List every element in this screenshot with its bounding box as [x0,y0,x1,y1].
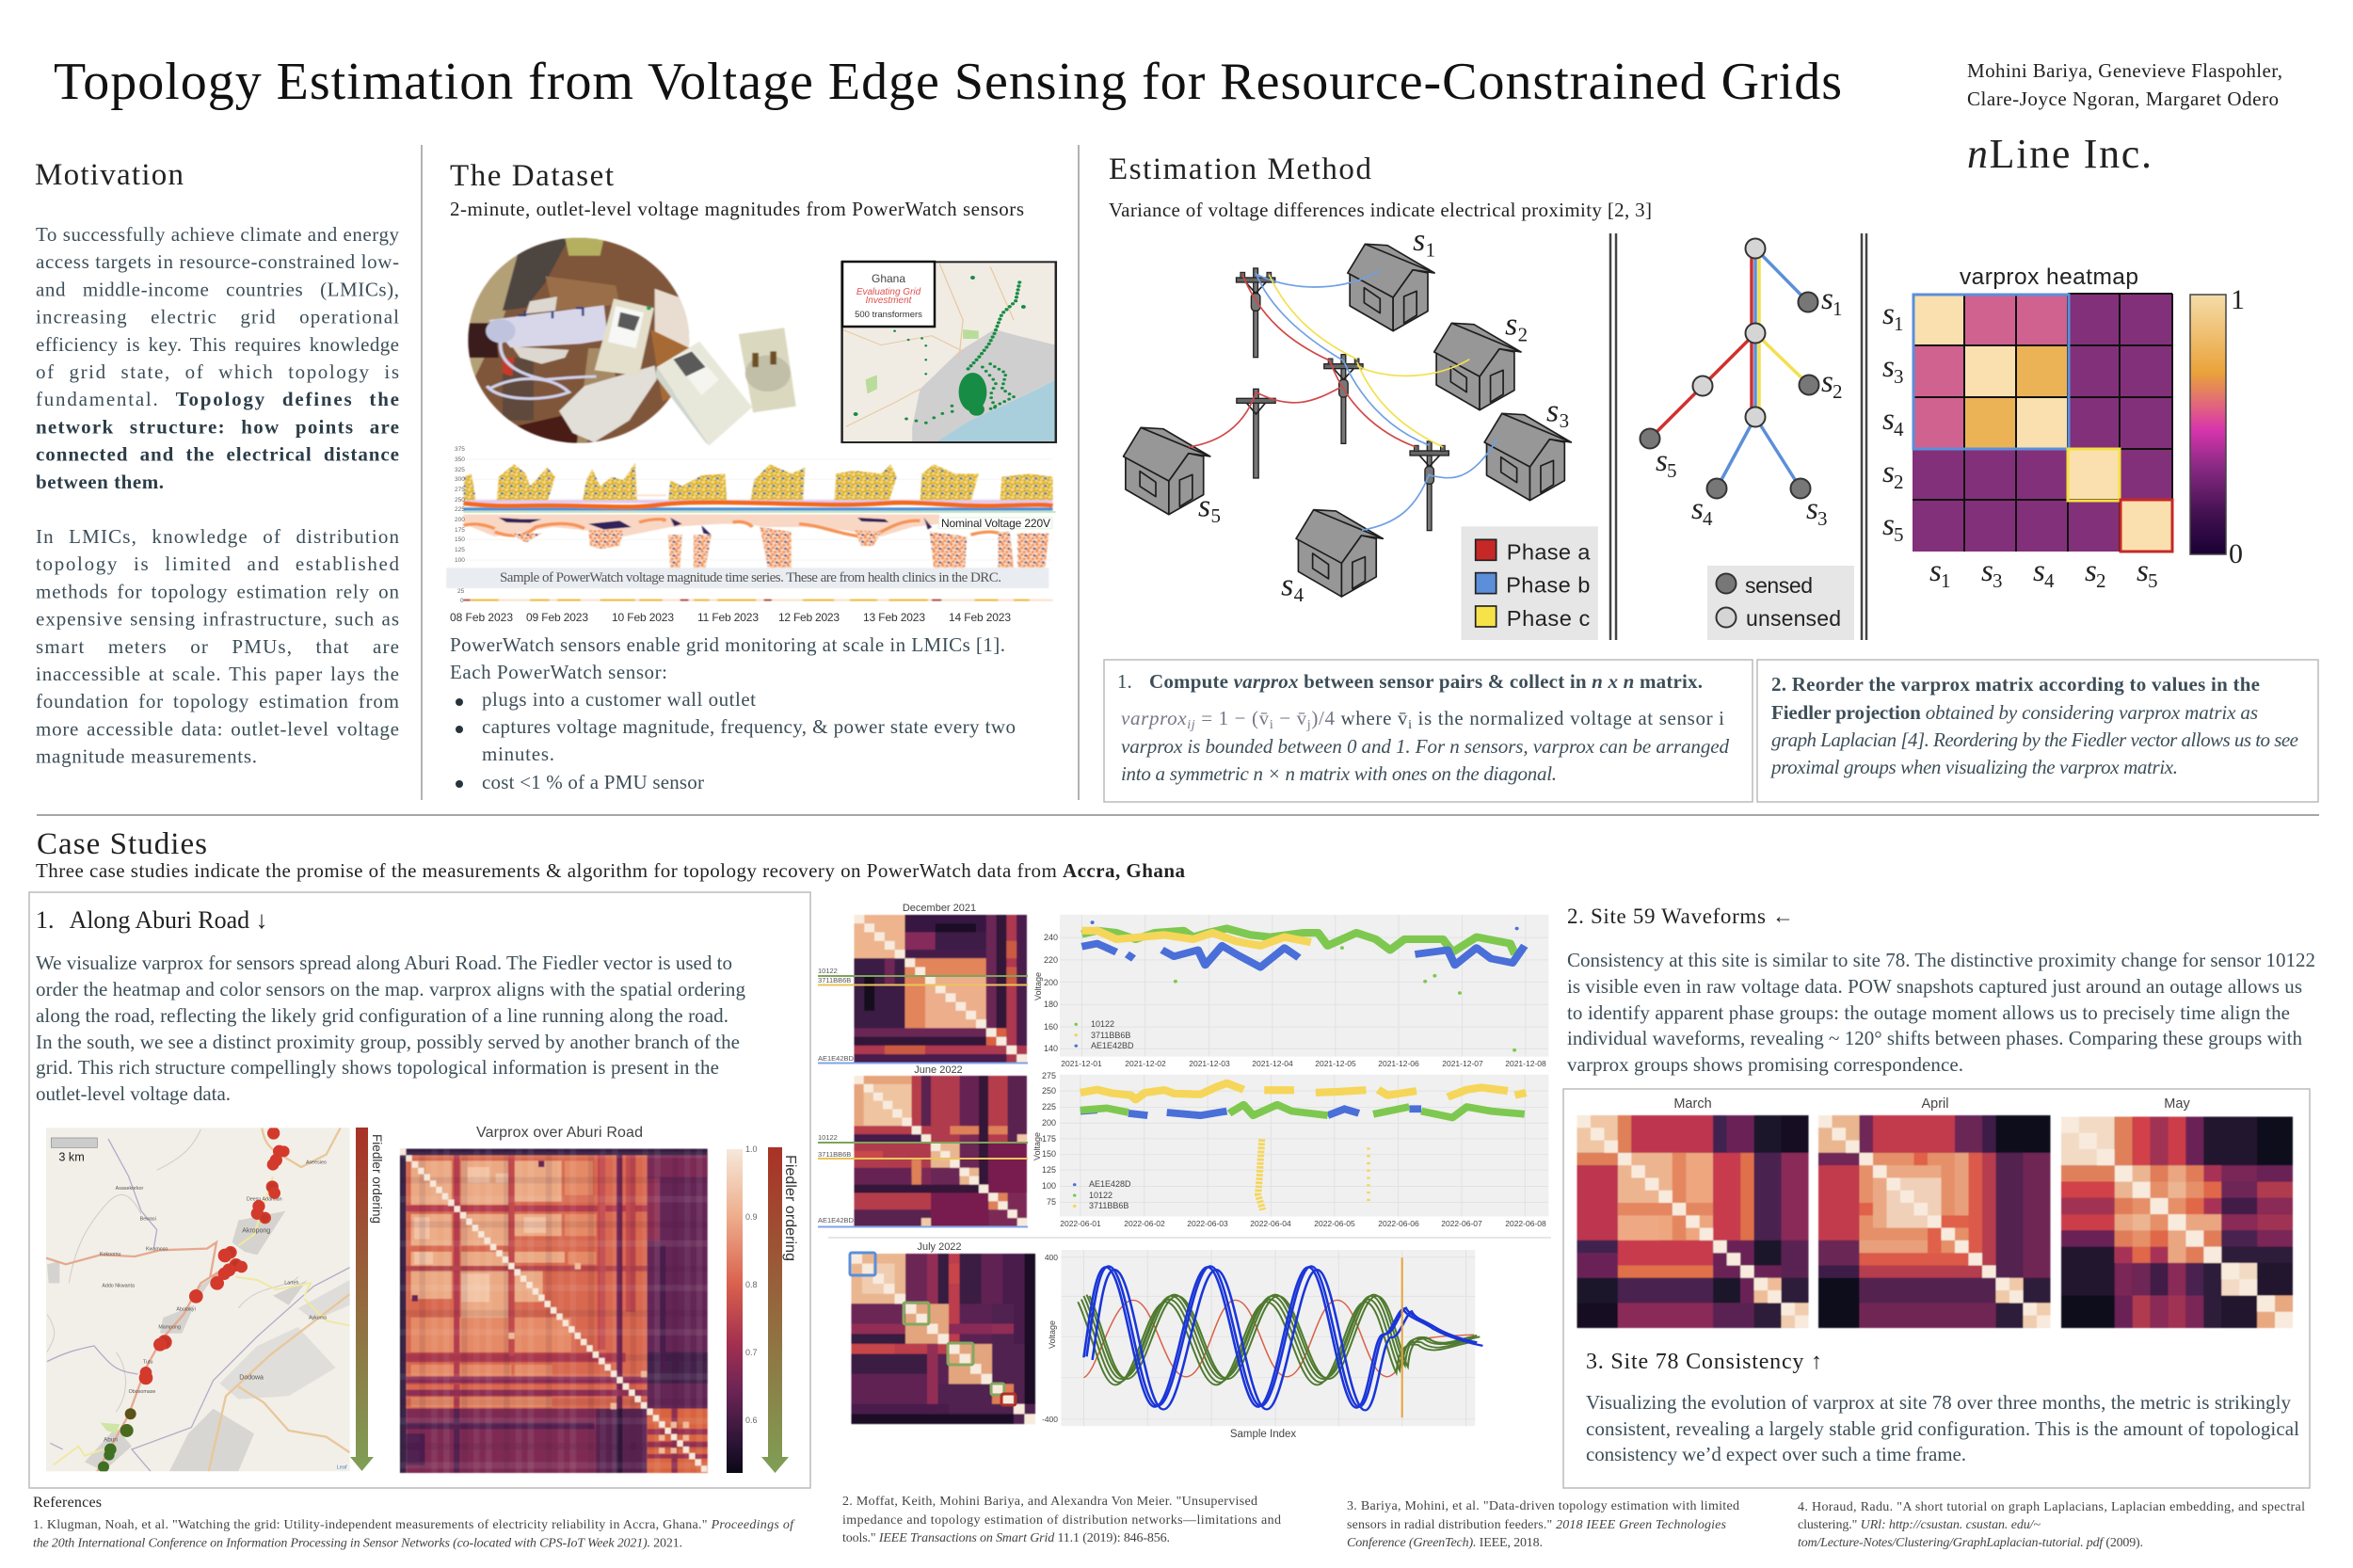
chart: varprox over Aburi Road heatmap: Varprox over Aburi Road [476,1125,643,1141]
text block: motivation paragraph one: of grid state, of which topology is [36,360,399,383]
text block: motivation paragraph one: fundamental. Topology defines the [36,388,399,410]
text block: site 59 description: varprox groups shows promising correspondence. [1567,1053,1963,1076]
diagram: network tree: s [1821,365,1833,399]
text block: site 59 description: to identify apparent phase groups: the outage moment allows us to precisely time align the [1567,1001,2290,1024]
map inset: Ghana label: Investment [866,296,913,306]
diagram: houses, poles and phase wiring [1124,223,1598,640]
map: Aburi Road sensors: Larteh [284,1280,298,1286]
heatmap: April [1818,1096,2050,1328]
reference 3: Conference (GreenTech). IEEE, 2018. [1347,1536,1543,1550]
reference 2: 2. Moffat, Keith, Mohini Bariya, and Alexandra Von Meier. "Unsupervised [842,1495,1257,1509]
diagram: network tree: 4 [1703,507,1713,530]
axis labels: sensors: s [1882,403,1895,437]
axis ticks: voltage: 325 [455,467,465,473]
chart: December 2021 voltage: 220 [1044,955,1058,965]
text block: motivation paragraph one: between them. [36,471,164,493]
diagram: houses, poles and phase wiring: 1 [1426,239,1435,262]
diagram: network tree: 2 [1833,380,1843,403]
heading: site 59 waveforms: 2. Site 59 Waveforms ← [1567,904,1794,928]
text block: motivation paragraph one: access targets in resource-constrained low- [36,250,399,273]
axis ticks: voltage: 275 [455,487,465,493]
reference 1: 1. Klugman, Noah, et al. "Watching the grid: Utility-independent measurements of electricity reliability in Accra, Ghana." Proceedings of [33,1518,795,1532]
chart: June 2022 voltage: 175 [1042,1134,1056,1144]
diagram: network tree: s [1806,492,1818,526]
axis labels: sensors: 5 [1894,523,1903,546]
callout: step 2 reorder matrix: graph Laplacian [4]. Reordering by the Fiedler vector allows us to see [1771,728,2298,751]
text block: Aburi description: outlet-level voltage data. [36,1082,231,1105]
axis labels: sensors: s [1929,554,1942,588]
photo: PowerWatch sensor in hands [463,235,796,445]
heatmap: June 2022: June 2022 [914,1064,963,1076]
heatmap: June 2022: AE1E42BD [818,1216,855,1224]
axis ticks: voltage: 25 [457,588,465,595]
axis labels: sensors: s [2085,554,2097,588]
diagram: network tree [1640,239,1854,640]
text block: dataset description: Each PowerWatch sensor: [450,661,667,683]
axis labels: sensors: 1 [1894,312,1903,335]
highlights: phase groups on heatmap [850,1253,1016,1405]
text block: Aburi description: grid. This rich structure compellingly shows topological information is present in the [36,1056,719,1079]
heading: site 78 consistency: 3. Site 78 Consistency ↑ [1586,1350,1822,1374]
heading: case studies: Case Studies [37,827,207,861]
colorbar: varprox scale: 1.0 [745,1144,758,1154]
callout: step 1 compute varprox: − v̄ [1273,707,1307,729]
chart: December 2021 voltage: 2021-12-05 [1315,1059,1356,1068]
text block: site 59 description: Consistency at this site is similar to site 78. The distinctive proximity change for sensor 10122 [1567,949,2315,971]
callout: step 2 reorder matrix: proximal groups when visualizing the varprox matrix. [1769,756,2178,778]
colorbar: varprox scale: 0.8 [745,1280,758,1289]
heatmap: July 2022: July 2022 [917,1241,962,1253]
diagram: houses, poles and phase wiring: s [1413,223,1425,258]
map: Aburi Road sensors: Abotakyi [176,1306,196,1312]
legend: phases [1461,526,1598,640]
map: Aburi Road sensors: Asasekorkor [116,1186,143,1192]
chart: July 2022 waveforms [1042,1250,1482,1440]
text block: dataset description: captures voltage magnitude, frequency, & power state every two [482,715,1016,738]
axis labels: sensors: s [1882,350,1895,384]
axis labels: sensors [1882,297,2157,592]
axis ticks: voltage: 250 [455,497,465,504]
diagram: houses, poles and phase wiring: 2 [1518,323,1528,345]
axis labels: sensors: 2 [2096,569,2106,592]
axis labels: sensors: 3 [1894,365,1903,388]
text block: site 78 description: Visualizing the evolution of varprox at site 78 over three months, the metric is strikingly [1586,1391,2291,1414]
axis labels: sensors: 1 [1941,569,1950,592]
axis ticks: voltage: 0 [460,598,464,604]
chart: June 2022 voltage: 2022-06-01 [1060,1219,1101,1228]
axis labels: sensors: s [2137,554,2149,588]
chart: varprox over Aburi Road heatmap [400,1125,798,1473]
text block: motivation paragraph two: inaccessible at scale. This paper lays the [36,663,399,685]
callout: step 1 compute varprox: varprox [1121,707,1187,729]
chart: December 2021 voltage: 160 [1044,1022,1058,1032]
axis ticks: voltage: 300 [455,476,465,483]
callout: step 1 compute varprox: into a symmetric n × n matrix with ones on the diagonal. [1121,762,1557,785]
chart: December 2021 voltage: 180 [1044,1000,1058,1009]
arrow: Fiedler ordering beside map [350,1128,384,1471]
diagram: houses, poles and phase wiring: 4 [1294,584,1305,606]
legend: sensed and unsensed: sensed [1745,573,1813,598]
callout: step 1 compute varprox: 1. [1117,670,1132,693]
map: Aburi Road sensors: 3 km [58,1150,85,1163]
axis dates [450,611,1011,624]
chart: PowerWatch voltage time series [446,446,1056,624]
legend: phases: Phase a [1507,539,1591,564]
chart: December 2021 voltage: 10122 [1091,1019,1114,1029]
chart: June 2022 voltage: 250 [1042,1086,1056,1096]
heading: the dataset: The Dataset [450,159,614,193]
diagram: network tree: 3 [1817,507,1828,530]
colorbar: varprox scale: 0.6 [745,1416,758,1425]
text block: site 59 description: individual waveforms, revealing ~ 120° shifts between phases. Comparing these groups with [1567,1027,2302,1049]
axis labels: sensors: 4 [2044,569,2055,592]
colorbar: varprox scale [727,1144,758,1473]
chart: December 2021 voltage: 2021-12-07 [1442,1059,1483,1068]
text block: Aburi description: In the south, we see a distinct proximity group, possibly served by another branch of the [36,1031,740,1053]
chart: December 2021 voltage: 240 [1044,933,1058,942]
reference 4 [1798,1500,2305,1550]
callout: step 1 compute varprox: varprox is bounded between 0 and 1. For n sensors, varprox can be arranged [1121,735,1730,758]
panel: site 78 consistency [1563,1089,2310,1488]
reference 4: tom/Lecture-Notes/Clustering/GraphLaplacian-tutorial. pdf (2009). [1798,1536,2143,1550]
diagram: houses, poles and phase wiring: 5 [1210,504,1221,527]
axis ticks: voltage [455,446,465,604]
chart: December 2021 voltage: 2021-12-03 [1189,1059,1230,1068]
reference 3: 3. Bariya, Mohini, et al. "Data-driven topology estimation with limited [1347,1499,1739,1513]
chart: June 2022 voltage: 2022-06-02 [1124,1219,1165,1228]
chart: June 2022 voltage: 225 [1042,1102,1056,1112]
references [33,1495,2305,1551]
text block: Aburi description: along the road, reflecting the likely grid configuration of a line running along the road. [36,1004,728,1027]
chart: June 2022 voltage: 2022-06-05 [1314,1219,1355,1228]
heading: along Aburi Road: 1. [36,906,55,934]
chart: December 2021 voltage: 200 [1044,978,1058,987]
map: Aburi Road sensors: Obosomase [129,1389,155,1395]
text block: motivation paragraph two: methods for topology estimation rely on [36,580,399,602]
callout: step 1 compute varprox: Compute varprox between sensor pairs & collect in n x n matrix. [1149,670,1703,693]
text block: motivation paragraph two: In LMICs, knowledge of distribution [36,525,399,548]
callout: step 1 compute varprox: )/4 [1311,707,1335,729]
axis labels: sensors: 3 [1993,569,2003,592]
map: Aburi Road sensors: Kokoomu [100,1252,121,1257]
references: References [33,1495,102,1511]
colorbar: varprox scale: 0.9 [745,1212,758,1222]
arrow: Fiedler ordering beside map: Fiedler ordering [370,1134,384,1224]
diagram: houses, poles and phase wiring: s [1505,308,1517,343]
text block: Aburi description: order the heatmap and color sensors on the map. varprox aligns with the spatial ordering [36,978,745,1000]
heatmap: March [1577,1096,1808,1328]
chart: June 2022 voltage: 3711BB6B [1089,1201,1128,1210]
map: Aburi Road sensors: Leaf [337,1465,347,1471]
heatmap: May [2061,1096,2293,1328]
text block: motivation paragraph one: increasing electric grid operational [36,305,399,328]
chart: December 2021 voltage: 2021-12-02 [1125,1059,1166,1068]
text block: motivation paragraph two: foundation for topology estimation from [36,690,399,712]
map inset: Ghana label: Ghana [872,272,905,285]
chart: varprox heatmap [1882,264,2245,592]
callout: step 2 reorder matrix [1757,660,2318,802]
logo: nLine Inc.: nLine Inc. [1967,131,2152,177]
map inset: Ghana label [842,262,935,327]
callout: step 1 compute varprox: ij [1187,718,1195,732]
legend: phases: Phase c [1507,606,1591,631]
text block: motivation paragraph two: more accessible data: outlet-level voltage [36,717,399,740]
panel: motivation [35,158,399,768]
chart: December 2021 voltage: 2021-12-04 [1252,1059,1293,1068]
axis dates: 10 Feb 2023 [612,611,674,624]
reference 4: clustering." URl: http://csustan. csustan. edu/~ [1798,1518,2041,1532]
chart: June 2022 voltage: 2022-06-06 [1378,1219,1419,1228]
chart: June 2022 voltage: 2022-06-03 [1187,1219,1228,1228]
heatmap: June 2022: 3711BB6B [818,1150,851,1159]
axis labels: sensors: 5 [2148,569,2157,592]
map inset: Ghana label: Evaluating Grid [856,287,921,297]
callout: step 1 compute varprox: where v̄ [1340,707,1407,729]
panel: case study 1 Aburi Road [29,892,810,1488]
chart: December 2021 voltage: AE1E42BD [1091,1041,1134,1050]
chart: varprox heatmap: varprox heatmap [1960,264,2138,290]
subheading: case studies: Three case studies indicate the promise of the measurements & algorithm for topology recovery on PowerWatch data from Accra, Ghana [36,859,1186,882]
heatmap: December 2021: AE1E42BD [818,1054,855,1063]
reference 2: impedance and topology estimation of distribution networks—limitations and [842,1513,1281,1528]
chart: June 2022 voltage: 75 [1047,1197,1056,1207]
map: Aburi Road sensors: Deesu Adamian [247,1196,282,1202]
chart: June 2022 voltage: 2022-06-07 [1441,1219,1482,1228]
chart: December 2021 voltage: 3711BB6B [1091,1031,1130,1040]
axis ticks: voltage: 225 [455,506,465,513]
callout: step 1 compute varprox: i [1270,718,1273,732]
chart: June 2022 voltage: 2022-06-04 [1250,1219,1291,1228]
axis ticks: voltage: 125 [455,547,465,553]
chart: July 2022 waveforms: Sample Index [1230,1429,1296,1440]
chart: June 2022 voltage: 10122 [1089,1191,1112,1200]
axis ticks: voltage: 350 [455,456,465,463]
callout: step 1 compute varprox [1104,660,1753,802]
axis dates: 09 Feb 2023 [526,611,588,624]
chart: June 2022 voltage: 200 [1042,1118,1056,1128]
chart: July 2022 waveforms: -400 [1042,1415,1058,1424]
chart: June 2022 voltage: 2022-06-08 [1505,1219,1546,1228]
text block: motivation paragraph two: topology is limited and established [36,552,399,575]
chart: December 2021 voltage [1033,915,1548,1068]
chart: June 2022 voltage: AE1E428D [1089,1179,1131,1189]
map: Aburi Road sensors: Aseesieo [306,1160,327,1166]
reference 2 [842,1495,1281,1545]
chart: June 2022 voltage: 125 [1042,1165,1056,1175]
axis dates: 13 Feb 2023 [863,611,925,624]
chart: July 2022 waveforms: Voltage [1048,1320,1057,1349]
text block: Aburi description [36,952,745,1105]
panel: the dataset [446,159,1056,793]
reference 1: the 20th International Conference on Information Processing in Sensor Networks (co-located with CPS-IoT Week 2021). 2021. [33,1536,682,1551]
axis ticks: voltage: 175 [455,527,465,534]
map: Ghana transformers [842,262,1056,442]
axis dates: 14 Feb 2023 [949,611,1011,624]
axis labels: sensors: s [1882,297,1895,331]
text block: dataset description: plugs into a customer wall outlet [482,688,756,711]
text block: site 78 description [1586,1391,2299,1465]
panel: site 59 heatmaps and charts [818,903,1551,1440]
text block: site 78 description: consistent, revealing a largely stable grid configuration. This is the amount of topological [1586,1417,2299,1440]
axis ticks: voltage: 100 [455,557,465,564]
text block: Aburi description: We visualize varprox for sensors spread along Aburi Road. The Fiedler vector is used to [36,952,732,974]
caption: time series: Sample of PowerWatch voltage magnitude time series. These are from health clinics in the DRC. [500,570,1001,585]
map: Aburi Road sensors: Aykuma [309,1315,327,1320]
axis labels: sensors: 4 [1894,418,1904,440]
colorbar: varprox scale: 0 [2229,538,2243,569]
text block: motivation paragraph one: efficiency is key. This requires knowledge [36,333,399,356]
diagram: network tree: s [1821,282,1833,316]
diagram: network tree: 5 [1667,459,1677,482]
map: Aburi Road sensors: Tutu [143,1359,152,1365]
diagram: houses, poles and phase wiring: s [1198,489,1210,523]
text block: dataset description: PowerWatch sensors enable grid monitoring at scale in LMICs [1]. [450,633,1005,656]
heading: along Aburi Road: Along Aburi Road ↓ [70,906,267,934]
text block: motivation paragraph two [36,525,399,768]
callout: step 1 compute varprox: is the normalized voltage at sensor i [1413,707,1724,729]
arrow: Fiedler ordering beside heatmap: Fiedler ordering [782,1155,798,1261]
axis labels: sensors: s [2033,554,2045,588]
text block: motivation paragraph one: and middle-income countries (LMICs), [36,279,399,301]
legend: phases: Phase b [1506,573,1590,598]
axis dates: 08 Feb 2023 [450,611,513,624]
chart: June 2022 voltage [1032,1071,1548,1228]
chart: December 2021 voltage: 140 [1044,1044,1058,1053]
text block: motivation paragraph one: connected and the electrical distance [36,442,399,465]
map inset: Ghana label: 500 transformers [855,310,922,320]
map: Aburi Road sensors: Dodowa [239,1375,264,1382]
axis dates: 11 Feb 2023 [697,611,759,624]
text block: motivation paragraph two: magnitude measurements. [36,745,257,768]
heatmap: March: March [1673,1096,1712,1112]
diagram: houses, poles and phase wiring: 3 [1560,409,1569,432]
chart: December 2021 voltage: 2021-12-01 [1061,1059,1102,1068]
axis ticks: voltage: 375 [455,446,465,453]
chart: December 2021 voltage: 2021-12-08 [1505,1059,1546,1068]
text block: motivation paragraph one: network structure: how points are [36,416,399,439]
heatmap: December 2021: 10122 [818,967,838,975]
axis labels: sensors: 2 [1894,471,1903,493]
axis ticks: voltage: 200 [455,517,465,523]
colorbar: varprox scale: 1 [2231,284,2245,315]
axis labels: sensors: s [1882,456,1895,489]
authors [1967,59,2282,110]
text block: motivation paragraph one [36,223,399,493]
map: Aburi Road sensors: Addo Nkwanta [102,1284,135,1289]
heatmap: June 2022 [818,1064,1028,1227]
text block: motivation paragraph one: To successfully achieve climate and energy [36,223,399,246]
callout: step 1 compute varprox: j [1306,718,1311,732]
heading: motivation: Motivation [35,158,184,192]
diagram: network tree: s [1691,492,1704,526]
heading: estimation method: Estimation Method [1109,152,1372,186]
callout: step 1 compute varprox: i [1408,718,1412,732]
map: Aburi Road sensors: Bewasi [140,1217,156,1223]
title: Topology Estimation from Voltage Edge Sensing for Resource-Constrained Grids [54,53,1842,111]
legend: sensed and unsensed: unsensed [1746,606,1841,631]
callout: step 2 reorder matrix: 2. Reorder the varprox matrix according to values in the [1771,673,2260,696]
chart: PowerWatch voltage time series: Nominal Voltage 220V [941,517,1050,530]
colorbar: varprox scale [2190,284,2245,569]
legend: sensed and unsensed [1707,566,1854,640]
chart: June 2022 voltage: 150 [1042,1149,1056,1159]
diagram: network tree: s [1656,444,1668,478]
map: Aburi Road sensors [46,1128,350,1472]
axis labels: sensors: s [1882,508,1895,542]
chart: June 2022 voltage: 275 [1042,1071,1056,1080]
heatmap: December 2021 [818,903,1028,1064]
heatmap: December 2021: December 2021 [903,903,976,914]
reference 3 [1347,1499,1739,1550]
heatmap: July 2022 [850,1241,1035,1424]
diagram: houses, poles and phase wiring: s [1546,394,1559,428]
authors: Mohini Bariya, Genevieve Flaspohler, [1967,59,2282,82]
subheading: estimation method: Variance of voltage differences indicate electrical proximity [2, 3] [1109,199,1652,221]
reference 3: sensors in radial distribution feeders." 2018 IEEE Green Technologies [1347,1518,1727,1532]
reference 4: 4. Horaud, Radu. "A short tutorial on graph Laplacians, Laplacian embedding, and spectral [1798,1500,2305,1514]
text block: site 78 description: consistency we’d expect over such a time frame. [1586,1443,1966,1465]
heatmap: December 2021: 3711BB6B [818,976,851,984]
text block: dataset description: minutes. [482,743,554,765]
reference 2: tools." IEEE Transactions on Smart Grid 11.1 (2019): 846-856. [842,1531,1170,1545]
text block: motivation paragraph two: expensive sensing infrastructure, such as [36,608,399,631]
diagram: houses, poles and phase wiring: s [1281,568,1293,602]
chart: June 2022 voltage: Voltage [1032,1132,1042,1160]
text block: site 59 description [1567,949,2315,1076]
arrow: Fiedler ordering beside heatmap [761,1147,798,1473]
chart: December 2021 voltage: Voltage [1033,972,1043,1000]
text block: motivation paragraph two: smart meters or PMUs, that are [36,635,399,658]
authors: Clare-Joyce Ngoran, Margaret Odero [1967,88,2279,110]
map: Aburi Road sensors: Mampong [158,1325,181,1331]
axis ticks: voltage: 150 [455,536,465,543]
reference 1 [33,1518,795,1551]
subheading: dataset: 2-minute, outlet-level voltage magnitudes from PowerWatch sensors [450,198,1024,220]
heatmap: June 2022: 10122 [818,1133,838,1142]
map: Aburi Road sensors: Akropong [242,1227,270,1234]
heatmap: April: April [1921,1096,1949,1112]
axis dates: 12 Feb 2023 [778,611,840,624]
text block: dataset description [450,633,1016,793]
axis labels: sensors: s [1981,554,1993,588]
callout: step 2 reorder matrix: Fiedler projection obtained by considering varprox matrix as [1771,701,2258,724]
text block: dataset description: cost <1 % of a PMU sensor [482,771,704,793]
chart: July 2022 waveforms: 400 [1045,1253,1058,1262]
map: Aburi Road sensors: Kwamoso [146,1246,168,1252]
chart: June 2022 voltage: 100 [1042,1181,1056,1191]
colorbar: varprox scale: 0.7 [745,1348,758,1357]
heatmap: May: May [2164,1096,2190,1112]
map: Aburi Road sensors: Aburi [104,1437,118,1444]
panel: estimation method [1104,152,2318,802]
text block: site 59 description: is visible even in raw voltage data. POW snapshots captured just around an outage allows us [1567,975,2302,998]
callout: step 1 compute varprox: = 1 − (v̄ [1195,707,1270,729]
diagram: network tree: 1 [1833,297,1843,320]
chart: December 2021 voltage: 2021-12-06 [1378,1059,1419,1068]
